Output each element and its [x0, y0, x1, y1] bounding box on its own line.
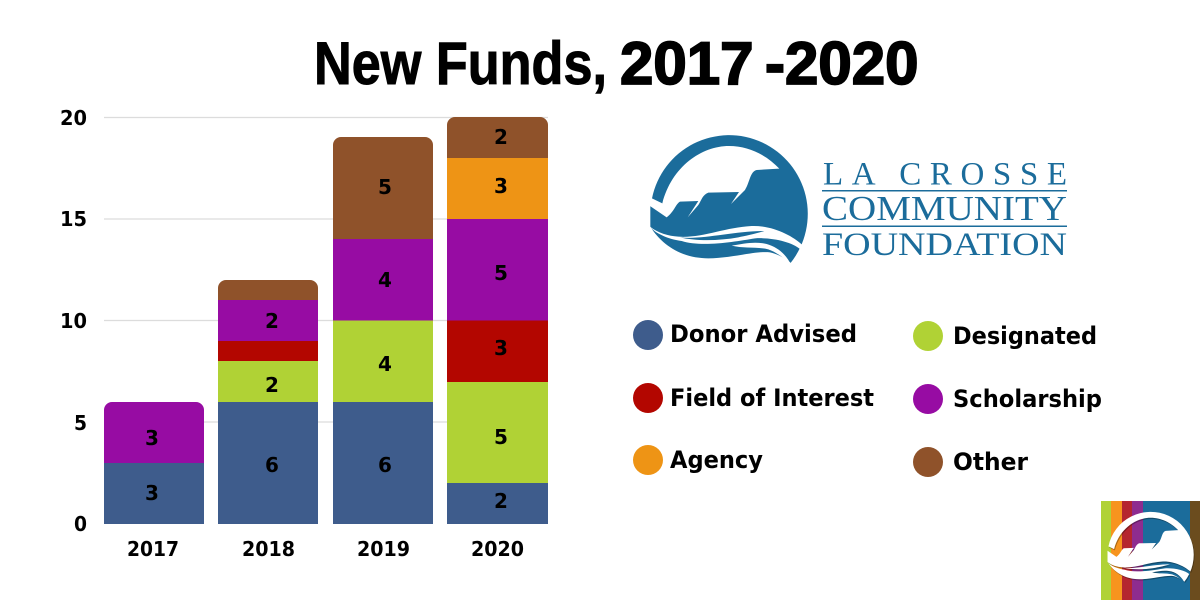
bar: 2019: 6: [378, 453, 392, 477]
legend item: Designated: [913, 321, 1097, 351]
title: 2020: [785, 30, 918, 97]
badge emblem shadow: [1108, 518, 1194, 583]
title: 2017: [620, 30, 753, 97]
bar: 2017: [104, 402, 204, 524]
title: -: [765, 30, 785, 97]
x axis labels: 2019: [357, 537, 410, 561]
y axis labels: 0: [74, 512, 87, 536]
logo wordmark: FOUNDATION: [822, 227, 1067, 263]
bar: 2020: 5: [494, 261, 508, 285]
legend item: Agency: Agency: [670, 446, 763, 474]
title: New Funds,: [314, 30, 607, 97]
bar: 2017: 3: [145, 426, 159, 450]
logo wordmark: LA CROSSE: [823, 156, 1067, 192]
bar: 2018: 2: [265, 309, 279, 333]
badge emblem: [1108, 512, 1194, 582]
bar: 2018: 6: [265, 453, 279, 477]
legend item: Scholarship: Scholarship: [953, 385, 1102, 413]
legend item: Other: [913, 447, 1028, 477]
legend item: Field of Interest: Field of Interest: [670, 384, 874, 412]
legend item: Other: Other: [953, 448, 1028, 476]
bar: 2019: 5: [378, 175, 392, 199]
bar: 2019: 4: [378, 352, 392, 376]
bar: 2018: 2: [265, 373, 279, 397]
x axis labels: 2018: [242, 537, 295, 561]
title: [314, 30, 918, 97]
stacked bar chart: [60, 106, 548, 561]
y axis labels: 15: [60, 207, 87, 231]
corner badge: [1101, 501, 1200, 600]
legend: [633, 320, 1102, 477]
y axis labels: 20: [60, 106, 87, 130]
bar: 2020: 2: [494, 125, 508, 149]
bar: 2019: [333, 137, 433, 524]
legend item: Designated: Designated: [953, 322, 1097, 350]
bar: 2017: 3: [145, 481, 159, 505]
bar: 2020: [447, 117, 548, 524]
y axis labels: 5: [74, 411, 87, 435]
bar: 2020: 2: [494, 489, 508, 513]
y axis labels: 10: [60, 309, 87, 333]
x axis labels: [127, 537, 524, 561]
bar: 2018: [218, 280, 318, 524]
bar: 2020: 5: [494, 425, 508, 449]
y axis labels: [60, 106, 87, 536]
logo wordmark: COMMUNITY: [822, 189, 1067, 228]
logo emblem: [650, 135, 808, 263]
bar: 2020: 3: [494, 336, 508, 360]
x axis labels: 2017: [127, 537, 179, 561]
bar: 2020: 3: [494, 174, 508, 198]
logo wordmark: [822, 156, 1067, 263]
x axis labels: 2020: [471, 537, 524, 561]
legend item: Agency: [633, 445, 763, 475]
legend item: Donor Advised: Donor Advised: [670, 320, 857, 348]
logo: La Crosse Community Foundation: [650, 135, 1067, 263]
bar: 2019: 4: [378, 268, 392, 292]
